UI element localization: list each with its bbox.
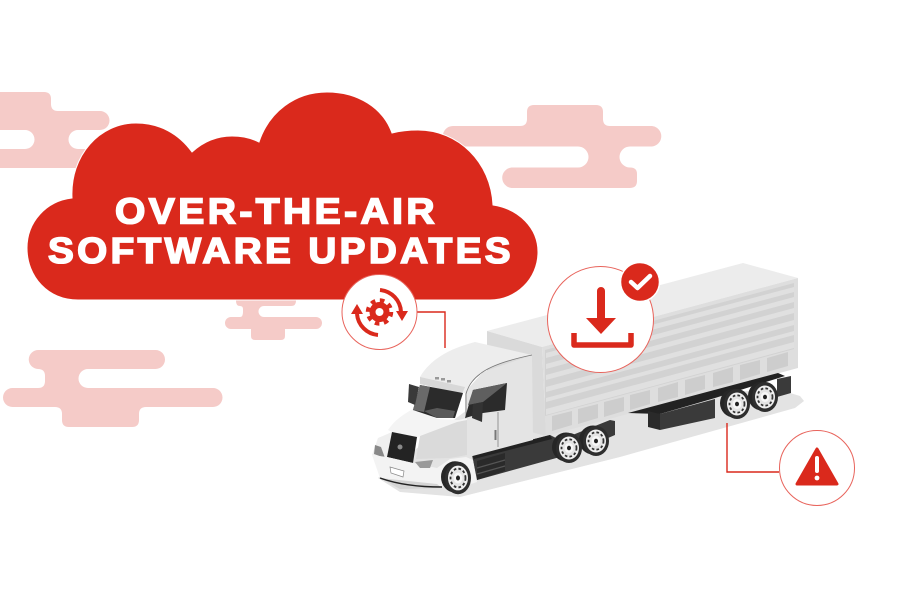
right mirror [472,402,483,422]
cab side [465,355,533,458]
exclamation mark [815,456,819,480]
grille [387,432,417,463]
title [48,190,514,271]
icon: gear update [342,274,417,350]
rotation arrows [357,290,401,335]
side window [465,383,507,418]
tray [574,333,631,345]
trailer top face [487,263,798,347]
pale cloud: top right [443,105,661,188]
pale cloud: bottom left [3,350,222,427]
truck illustration [372,263,804,497]
rear tractor wheels [552,426,609,463]
roof fairing [420,342,532,393]
visor [420,377,465,394]
down arrow [586,287,616,334]
pale cloud: under main cloud [225,298,322,340]
bumper shadow line [380,478,442,487]
cab edge line [466,355,532,455]
plate [390,467,404,477]
left mirror [408,384,419,405]
trailer wheels [720,382,778,419]
icon: download [548,266,654,372]
bumper lower shading [380,478,442,489]
ground shadow [378,390,804,497]
title: OVER-THE-AIR [115,190,438,232]
cab [372,342,533,494]
gear [368,300,391,324]
main red cloud [27,92,538,300]
grille emblem [398,444,402,450]
headlight right [415,460,433,468]
hood side [416,420,467,459]
chassis [472,420,615,480]
trailer side face [542,278,798,436]
bumper and fender [372,455,477,488]
front wheel [441,461,471,494]
pale cloud: top left [0,92,110,168]
title: SOFTWARE UPDATES [48,230,514,271]
warning triangle [797,449,837,484]
icon: alert [780,430,854,506]
connector: gear to cab [417,312,445,348]
headlight left [374,445,385,458]
windshield [413,385,463,418]
left fender [372,432,392,457]
door lines [497,412,499,447]
icon: check badge [620,262,660,302]
trailer underside and toolbox [628,373,791,430]
hood [388,408,467,438]
trailer front face [487,331,546,436]
connector: wheel to alert [727,423,779,472]
